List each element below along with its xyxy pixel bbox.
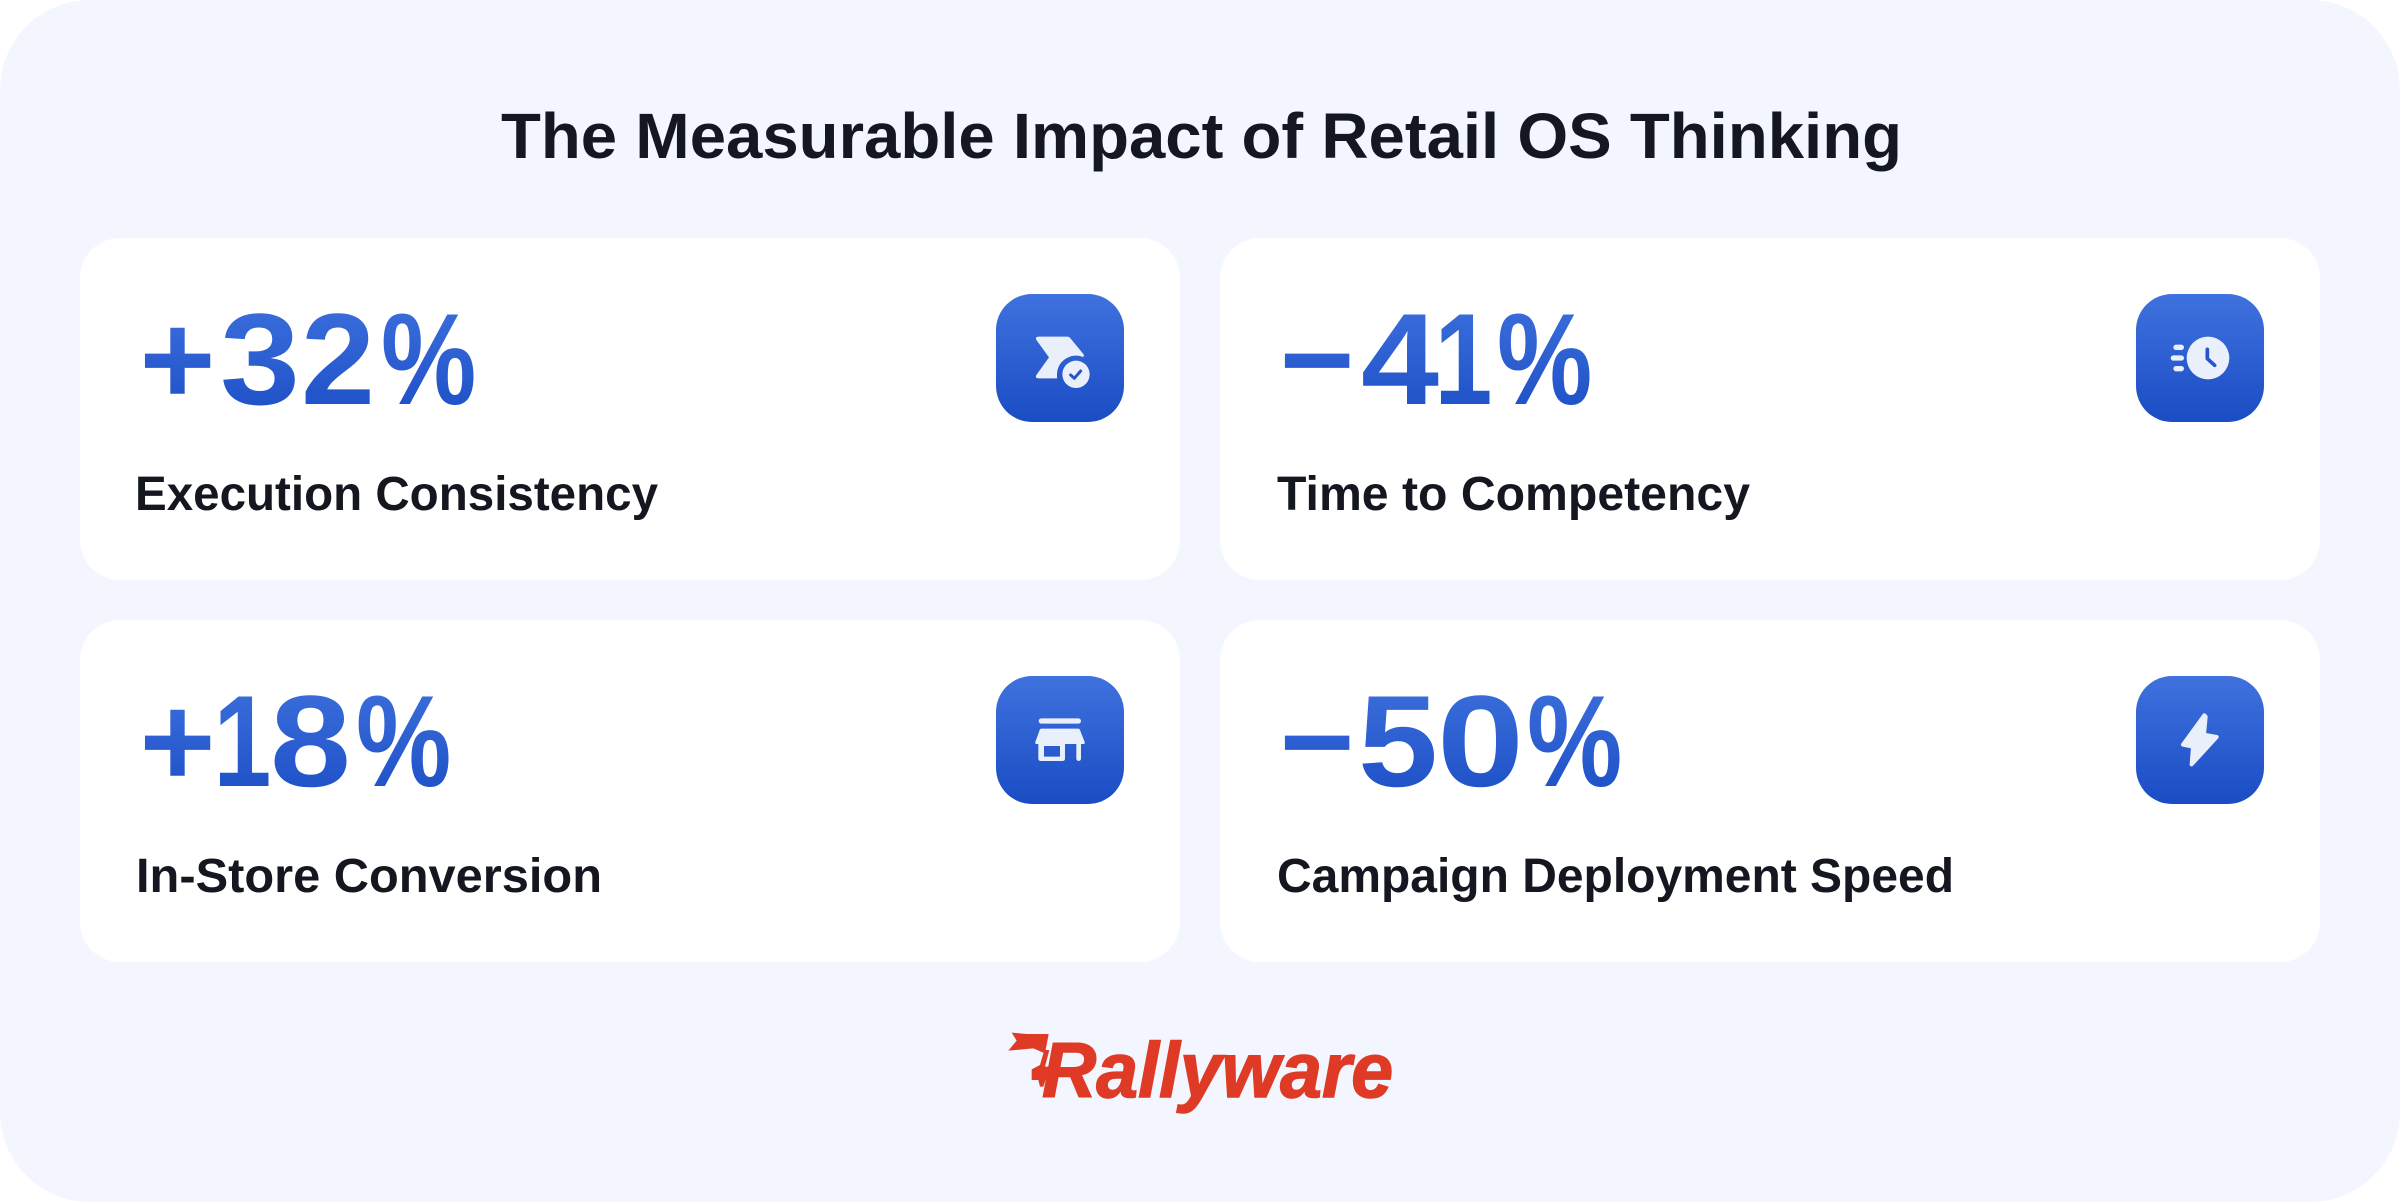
- stat: +32%: +: [140, 286, 216, 432]
- logo: Rallyware: Rallyware: [1042, 1026, 1393, 1114]
- label: execution consistency: Execution Consistency: [135, 468, 658, 521]
- panel: execution consistency: [80, 238, 1180, 580]
- icon: storefront: [996, 676, 1124, 804]
- stat: +32%: 2: [301, 286, 375, 432]
- label: campaign deployment speed: Campaign Deployment Speed: [1277, 850, 1954, 903]
- stat: +32%: %: [381, 286, 476, 432]
- stat: -41%: %: [1497, 286, 1592, 432]
- icon: chevron with check badge: [996, 294, 1124, 422]
- panel: in-store conversion: [80, 620, 1180, 962]
- icon: lightning bolt: [2136, 676, 2264, 804]
- title: The Measurable Impact of Retail OS Thinking: [501, 100, 1902, 172]
- stat: -50%: [1280, 668, 1622, 814]
- stat: +18%: [140, 668, 451, 814]
- icon: fast clock: [2136, 294, 2264, 422]
- stat: -50%: %: [1527, 668, 1622, 814]
- stat: +18%: %: [356, 668, 451, 814]
- icon: flag: [1008, 1033, 1057, 1087]
- panel: time to competency: [1220, 238, 2320, 580]
- stat: -50%: 5: [1358, 668, 1438, 814]
- stat: -41%: −: [1280, 286, 1355, 432]
- stat: +32%: [140, 286, 476, 432]
- stat: -41%: [1280, 286, 1592, 432]
- stat: +32%: 3: [220, 286, 300, 432]
- stat: +18%: 8: [270, 668, 351, 814]
- stat: -50%: −: [1280, 668, 1355, 814]
- stat: +18%: +: [140, 668, 216, 814]
- stat: +18%: 1: [213, 668, 271, 814]
- panel: campaign deployment speed: [1220, 620, 2320, 962]
- stat: -50%: 0: [1437, 668, 1524, 814]
- label: time to competency: Time to Competency: [1277, 468, 1750, 521]
- label: in-store conversion: In-Store Conversion: [136, 850, 602, 903]
- stat: -41%: 1: [1434, 286, 1492, 432]
- stat: -41%: 4: [1361, 286, 1439, 432]
